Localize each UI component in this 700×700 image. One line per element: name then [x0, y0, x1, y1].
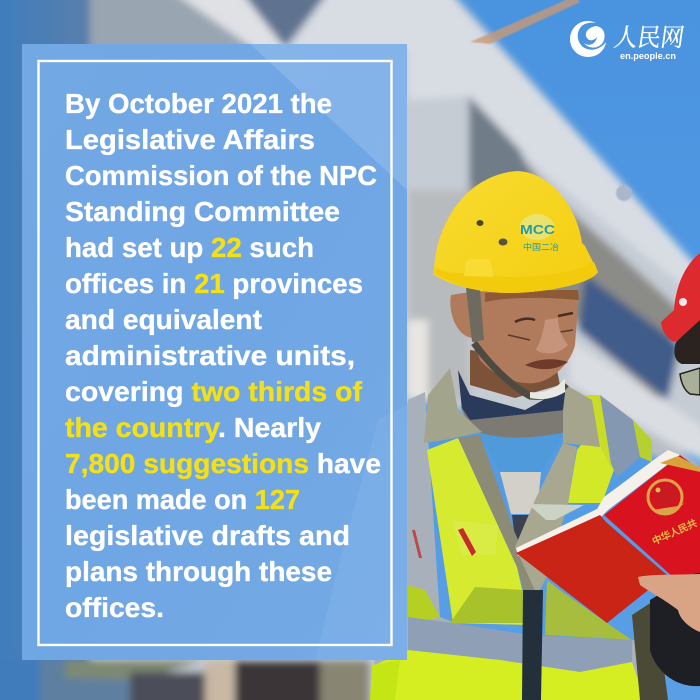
undershirt — [458, 370, 565, 548]
main text block: Legislative Affairs — [65, 124, 315, 155]
main text block: By October 2021 the — [65, 88, 332, 119]
main text block: plans through these — [65, 556, 332, 587]
hand — [638, 574, 700, 632]
neck and face — [450, 290, 579, 398]
hat caption text: 中国二冶 — [523, 242, 560, 252]
main text block: covering two thirds of — [65, 376, 363, 407]
main text block: 7,800 suggestions have — [65, 448, 381, 479]
red book — [516, 450, 700, 623]
book title text: 中华人民共 — [650, 516, 699, 548]
icon: national emblem — [648, 480, 685, 515]
main text block: been made on 127 — [65, 484, 300, 515]
icon: logo swirl — [570, 21, 606, 57]
logo: People's Daily Online — [570, 18, 687, 62]
main text block: the country. Nearly — [65, 412, 322, 443]
icon: yellow hard hat — [433, 171, 598, 293]
person: second worker at right — [661, 253, 700, 395]
main text block: and equivalent — [65, 304, 262, 335]
main text block: offices in 21 provinces — [65, 268, 363, 299]
panel inner border — [38, 61, 392, 645]
main text block: had set up 22 such — [65, 232, 314, 263]
dark sleeve — [632, 570, 700, 700]
main text block: Standing Committee — [65, 196, 340, 227]
logo URL: en.people.cn — [620, 51, 676, 62]
jacket collar and placket — [424, 368, 600, 595]
main text block: Commission of the NPC — [65, 160, 377, 191]
main text block: legislative drafts and — [65, 520, 350, 551]
person: worker in hard hat — [370, 171, 655, 700]
helmet strap — [466, 288, 566, 399]
logo Chinese name: 人民网 — [612, 18, 687, 54]
main text block: administrative units, — [65, 340, 355, 371]
book left cover — [516, 515, 667, 623]
hat logo text: MCC — [520, 222, 556, 237]
body: vest base — [370, 392, 655, 700]
panel: translucent blue card — [22, 44, 407, 660]
book right cover — [604, 455, 700, 577]
main text block — [65, 88, 381, 623]
book page edges — [516, 450, 680, 556]
zipper — [522, 590, 543, 700]
main text block: offices. — [65, 592, 164, 623]
